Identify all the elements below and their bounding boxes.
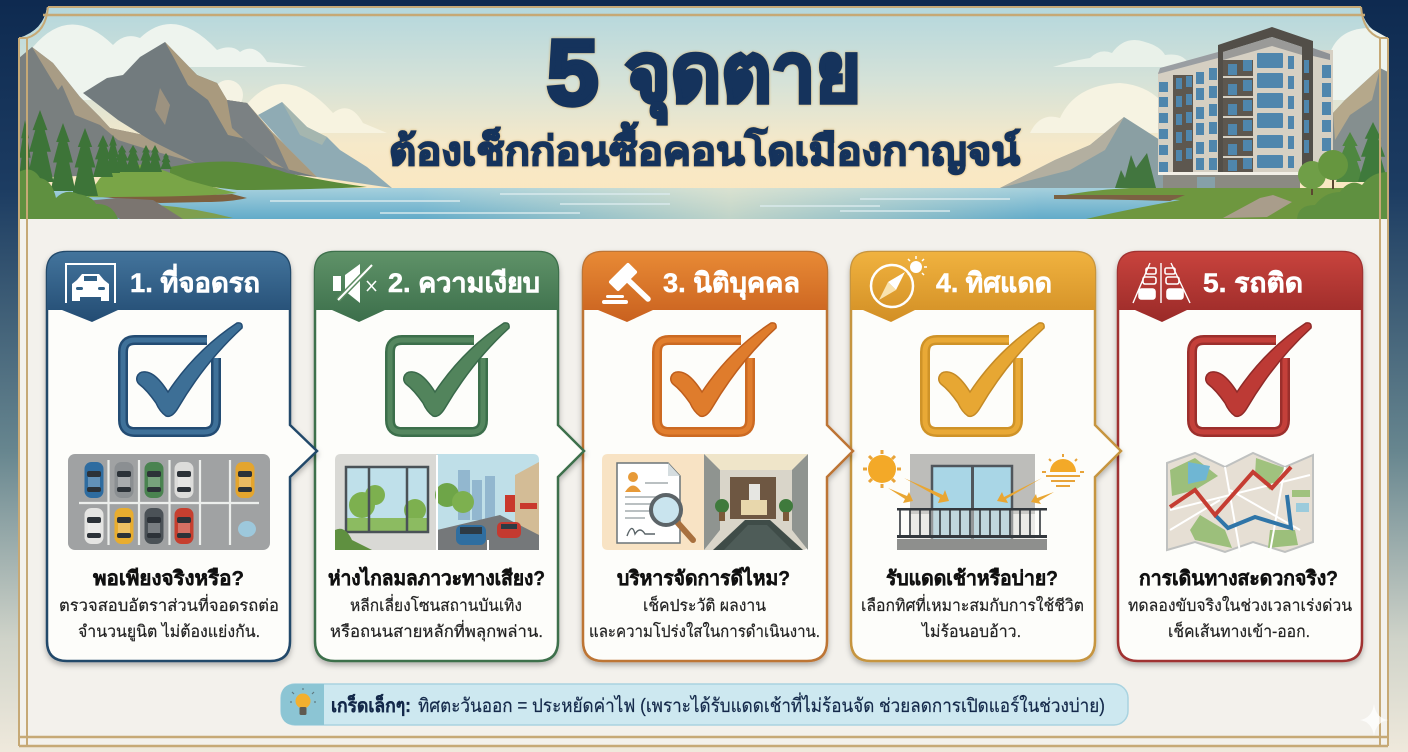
sky [19,7,1388,219]
card body [851,252,1121,661]
card header [1118,252,1362,322]
building windows [1159,53,1331,172]
water [19,188,1388,219]
clouds right [1030,28,1388,133]
check box [390,323,509,432]
description [1128,596,1352,641]
tip label: เกร็ดเล็กๆ: [331,693,411,717]
card header [47,252,290,322]
heading: 5. รถติด [1203,268,1303,298]
description [330,594,543,642]
check box [925,323,1044,432]
description: จำนวนยูนิต ไม่ต้องแย่งกัน. [78,622,260,642]
description: ตรวจสอบอัตราส่วนที่จอดรถต่อ [59,594,279,615]
description: ทดลองขับจริงในช่วงเวลาเร่งด่วน [1128,596,1352,615]
card 3: juristic person [583,252,853,661]
description: ไม่ร้อนอบอ้าว. [920,622,1021,641]
check box [123,323,242,432]
description [589,595,820,641]
card 5: traffic [1118,252,1362,661]
description: เช็คประวัติ ผลงาน [643,595,766,615]
question: บริหารจัดการดีไหม? [617,566,790,590]
card body [315,252,584,661]
card header [583,252,827,322]
check box [657,323,776,432]
trees left [18,110,172,196]
heading: 4. ทิศแดด [936,268,1052,298]
description: เลือกทิศที่เหมาะสมกับการใช้ชีวิต [861,594,1084,615]
hills left [170,162,367,190]
main heading [547,22,861,124]
card header [315,252,558,322]
illustration: map with routes [1167,453,1313,552]
icon: sparkle [1360,704,1388,736]
description: หรือถนนสายหลักที่พลุกพล่าน. [330,620,543,642]
check box [1192,323,1311,432]
description [59,594,279,642]
illustration: parking lot [68,454,270,550]
card body [583,252,853,661]
card header [851,252,1095,322]
icon: compass and sun [871,256,927,307]
card body [1118,252,1362,661]
question: รับแดดเช้าหรือบ่าย? [886,567,1058,590]
icon: muted speaker [333,264,376,303]
description [861,594,1084,641]
building [1158,27,1333,188]
heading: 1. ที่จอดรถ [130,263,260,298]
icon: gavel [602,262,648,304]
question: พอเพียงจริงหรือ? [93,567,244,590]
icon: traffic jam road [1133,263,1190,303]
card 4: sun direction [851,252,1121,661]
bushes left [19,170,118,219]
description: เช็คเส้นทางเข้า-ออก. [1168,621,1310,641]
mountains right [1000,117,1175,188]
illustration: balcony with sun [863,450,1084,550]
trees right [1297,122,1388,219]
sub heading: ต้องเช็กก่อนซื้อคอนโดเมืองกาญจน์ [389,122,1020,175]
card 1: parking [47,252,317,661]
icon: car in garage [66,264,115,303]
description: และความโปร่งใสในการดำเนินงาน. [589,622,820,641]
heading: 3. นิติบุคคล [663,268,800,300]
icon: light bulb [281,684,324,725]
title [389,22,1020,175]
main heading: 5 [547,22,598,124]
card 2: quietness [315,252,584,661]
clouds left [33,24,387,133]
card body [47,252,317,661]
question: การเดินทางสะดวกจริง? [1139,568,1338,590]
land right [1054,188,1388,219]
main heading: จุดตาย [625,28,861,124]
header landscape [18,7,1388,219]
tip text: ทิศตะวันออก = ประหยัดค่าไฟ (เพราะได้รับแดดเช้าที่ไม่ร้อนจัด ช่วยลดการเปิดแอร์ในช่วงบ่าย) [418,692,1105,717]
illustration: quiet window and busy street [335,454,539,550]
mountains left [19,47,200,178]
description: หลีกเลี่ยงโซนสถานบันเทิง [350,594,522,615]
tip bar [281,684,1128,725]
illustration: document and lobby [602,454,808,550]
question: ห่างไกลมลภาวะทางเสียง? [328,566,545,590]
heading: 2. ความเงียบ [388,268,540,298]
